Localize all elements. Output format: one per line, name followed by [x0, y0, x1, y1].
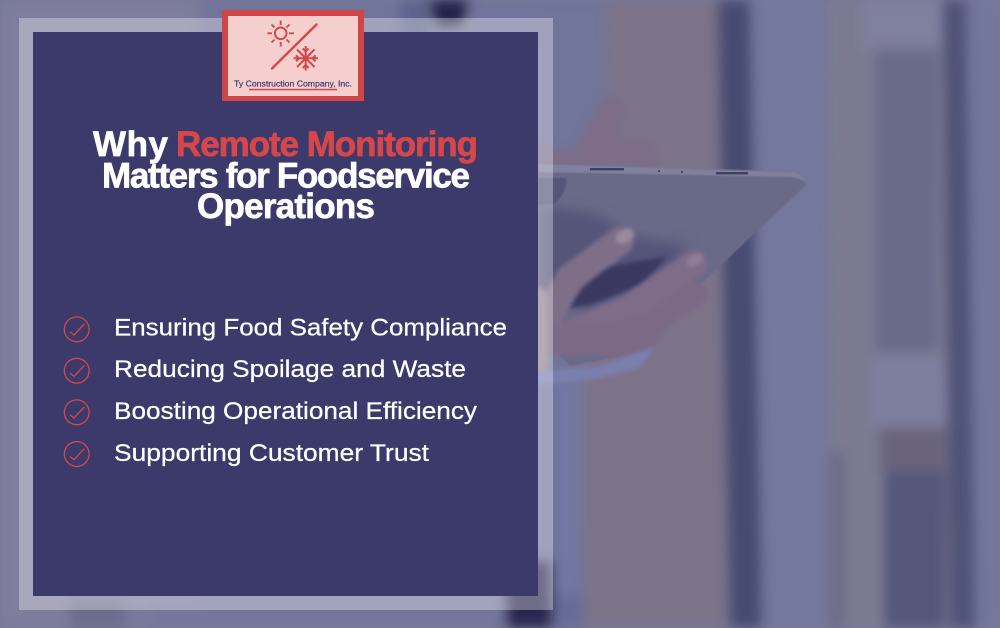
title: Operations	[197, 187, 375, 226]
logo underline	[249, 89, 337, 90]
icon: diagonal slash	[272, 24, 316, 68]
panel: main navy card	[33, 32, 538, 596]
list item: customer trust: Supporting Customer Trust	[114, 440, 429, 467]
tablet	[538, 164, 805, 366]
logo wordmark: Ty Construction Company, Inc.	[234, 78, 352, 88]
list item: spoilage: Reducing Spoilage and Waste	[114, 356, 466, 383]
title: Matters for Foodservice	[102, 156, 470, 196]
icon: snowflake	[294, 46, 318, 70]
hand behind the tablet	[540, 94, 658, 170]
title: Remote Monitoring	[176, 125, 478, 164]
list item: food safety: Ensuring Food Safety Compliance	[114, 314, 507, 342]
hand holding the tablet	[534, 234, 698, 362]
icon: sun	[268, 20, 294, 46]
checklist	[64, 314, 507, 467]
title: Why	[93, 125, 169, 164]
translucent frame around panel	[19, 18, 553, 610]
list item: efficiency: Boosting Operational Efficiency	[114, 398, 477, 425]
title	[93, 125, 478, 226]
logo badge	[222, 10, 364, 101]
